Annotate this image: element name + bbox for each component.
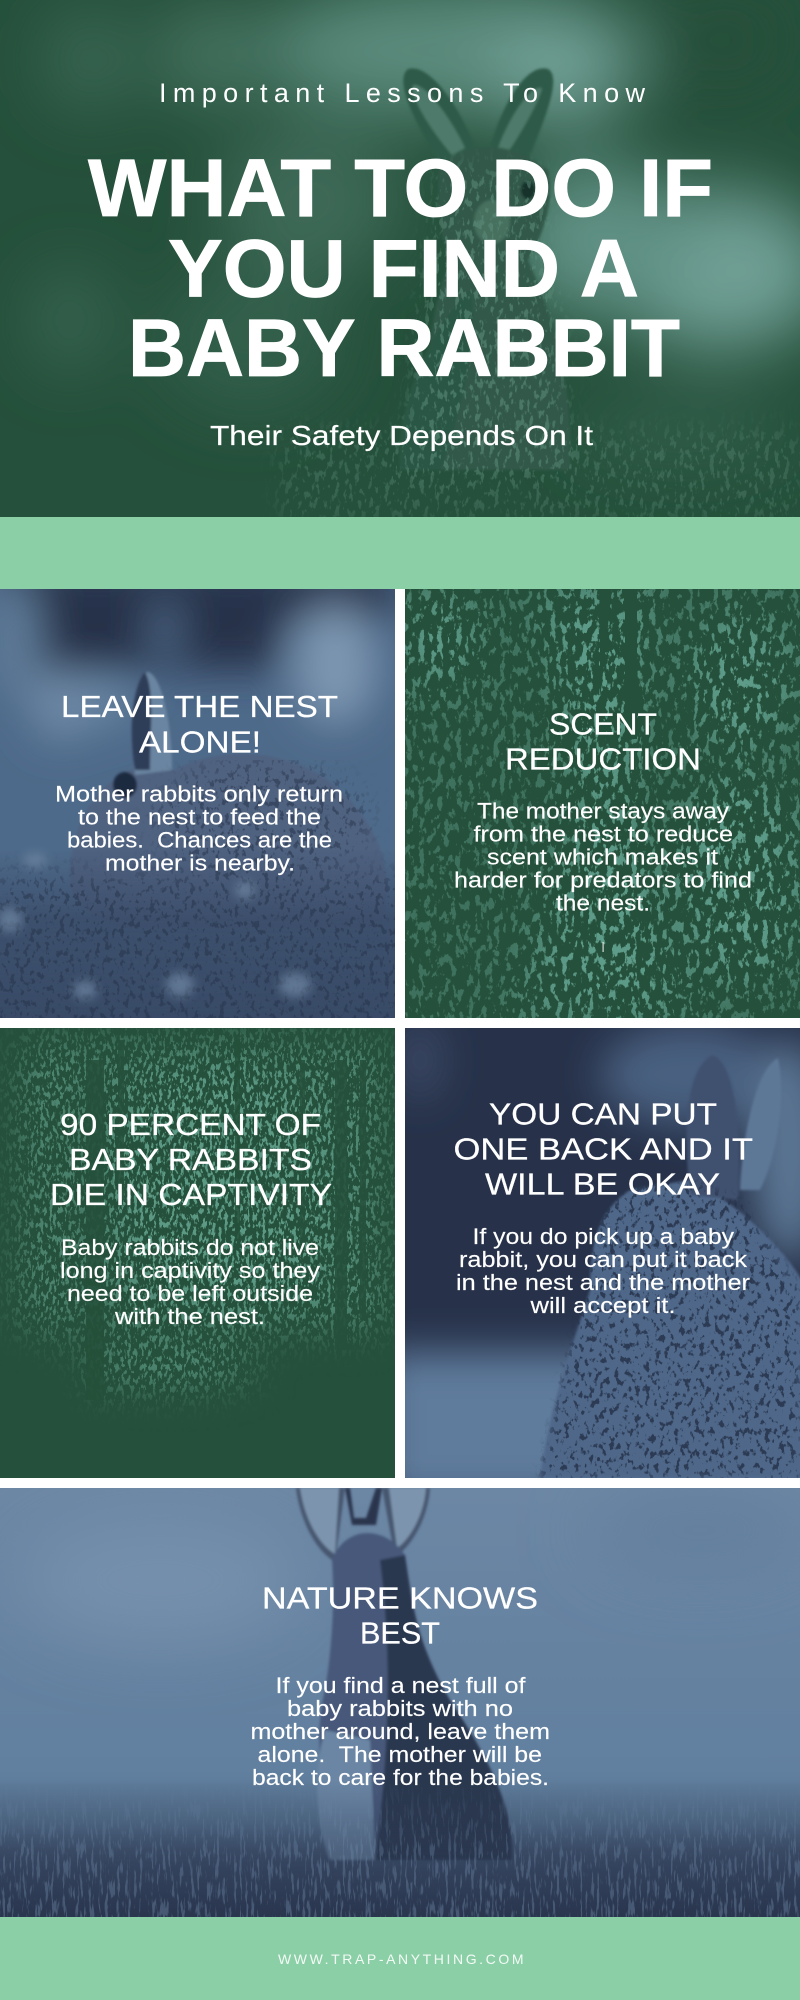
body text: back to care for the babies.	[252, 1765, 549, 1790]
body text	[456, 1224, 750, 1318]
grass	[0, 1795, 800, 1888]
mint band	[0, 517, 800, 589]
body text: The mother stays away	[477, 798, 729, 824]
rabbit	[540, 1055, 800, 1478]
heading: 90 PERCENT OF	[60, 1107, 321, 1142]
photo: tree canopy	[405, 589, 800, 1018]
panel: 90 percent die in captivity	[0, 1028, 395, 1478]
rabbit	[296, 1488, 512, 1860]
body text: to the nest to feed the	[78, 804, 321, 830]
body text	[454, 798, 752, 916]
photo: rabbit in flowers	[0, 560, 395, 1020]
body text: will accept it.	[529, 1293, 676, 1318]
heading: WILL BE OKAY	[485, 1166, 720, 1202]
body text: If you find a nest full of	[276, 1673, 526, 1698]
body text: scent which makes it	[487, 844, 718, 870]
footer url: WWW.TRAP-ANYTHING.COM	[278, 1951, 524, 1967]
body text: babies. Chances are the	[67, 828, 332, 852]
heading	[50, 1107, 332, 1212]
heading: YOU CAN PUT	[489, 1096, 717, 1132]
heading: NATURE KNOWS	[262, 1580, 538, 1616]
panel: leave the nest alone	[0, 560, 395, 1020]
panel: hero header	[0, 0, 800, 517]
photo: rabbit from behind	[405, 1028, 800, 1478]
panel: you can put one back	[405, 1028, 800, 1478]
main title: YOU FIND A	[168, 224, 639, 314]
heading	[262, 1580, 538, 1650]
main title	[88, 143, 713, 394]
body text: alone. The mother will be	[258, 1742, 542, 1767]
heading: LEAVE THE NEST	[61, 689, 338, 724]
heading	[454, 1096, 753, 1202]
body text: harder for predators to find	[454, 868, 752, 892]
heading	[61, 689, 338, 760]
heading: SCENT	[549, 706, 657, 742]
heading: BEST	[360, 1616, 440, 1650]
heading: ONE BACK AND IT	[454, 1132, 753, 1166]
heading: REDUCTION	[505, 742, 701, 776]
subtitle: Their Safety Depends On It	[210, 420, 593, 451]
body text: rabbit, you can put it back	[459, 1247, 748, 1272]
heading: ALONE!	[139, 724, 261, 760]
grass foreground	[0, 850, 395, 1018]
photo: standing rabbit in grass	[0, 1488, 800, 1920]
body text: mother is nearby.	[105, 850, 295, 876]
body text	[55, 782, 343, 876]
rabbit silhouette	[399, 68, 571, 470]
heading	[505, 706, 701, 776]
rabbit	[72, 672, 382, 866]
main title: WHAT TO DO IF	[88, 143, 713, 234]
body text	[250, 1673, 550, 1790]
photo: forest	[0, 1028, 395, 1478]
body text: in the nest and the mother	[456, 1270, 750, 1295]
body text: Mother rabbits only return	[55, 782, 343, 806]
body text: mother around, leave them	[250, 1719, 550, 1744]
body text: need to be left outside	[67, 1281, 313, 1306]
kicker line: Important Lessons To Know	[159, 78, 646, 108]
body text: long in captivity so they	[60, 1258, 320, 1283]
main title: BABY RABBIT	[128, 303, 680, 394]
panel: footer band	[0, 1917, 800, 2000]
body text: the nest.	[556, 890, 650, 916]
heading: DIE IN CAPTIVITY	[50, 1177, 332, 1212]
body text: from the nest to reduce	[474, 822, 733, 846]
panel: scent reduction	[405, 589, 800, 1018]
small stray mark	[602, 942, 604, 952]
hero photo: rabbit in field	[0, 0, 800, 517]
panel: nature knows best	[0, 1488, 800, 1920]
body text: If you do pick up a baby	[472, 1224, 734, 1249]
heading: BABY RABBITS	[69, 1142, 312, 1177]
body text: Baby rabbits do not live	[61, 1235, 319, 1260]
fur and grass speckle	[276, 159, 800, 517]
body text: with the nest.	[114, 1304, 265, 1329]
body text	[60, 1235, 320, 1329]
body text: baby rabbits with no	[287, 1696, 513, 1721]
